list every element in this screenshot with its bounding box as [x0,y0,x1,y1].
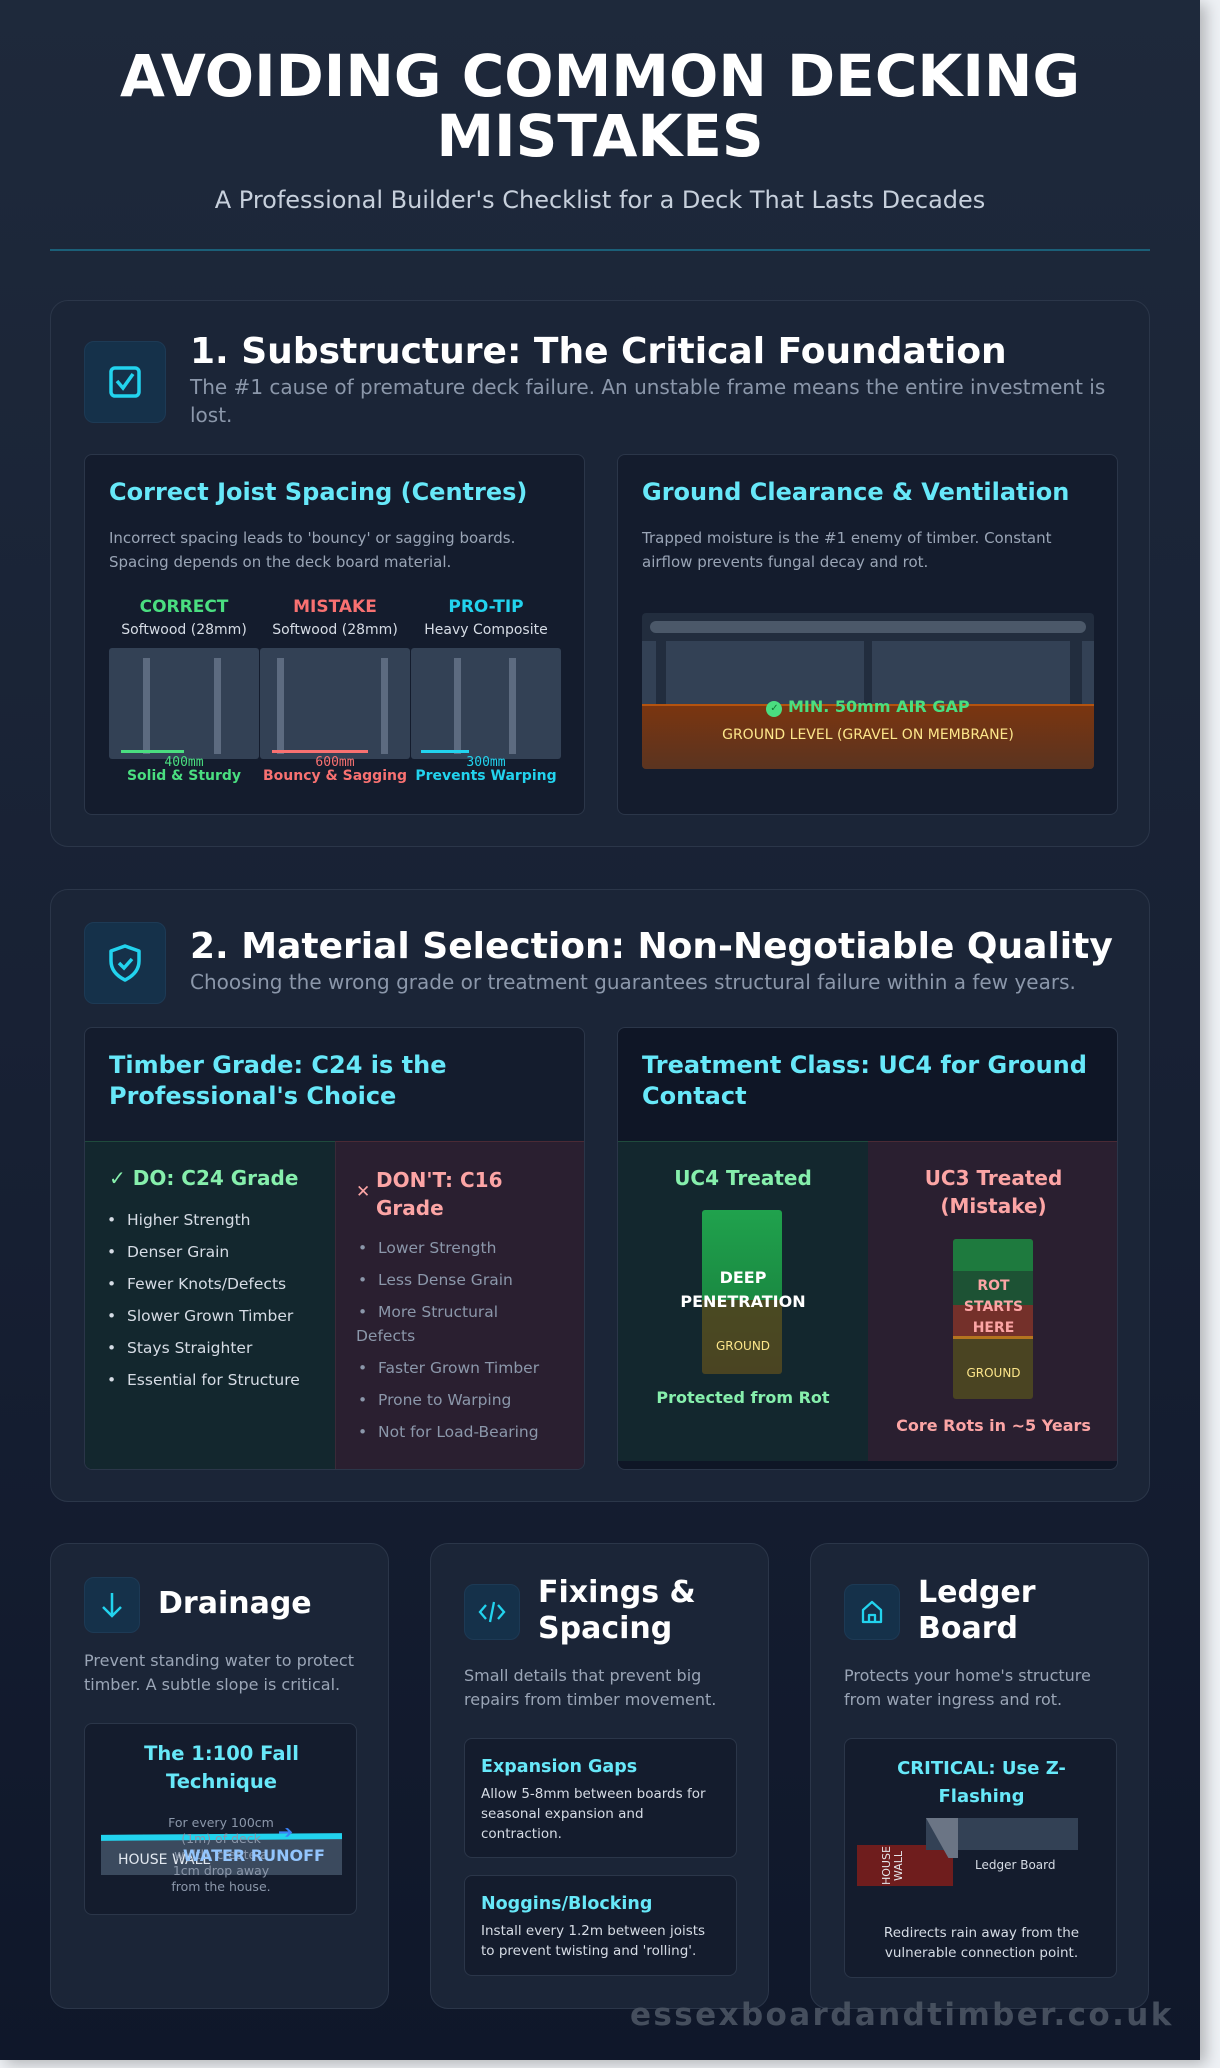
panel: joist spacing [84,454,585,815]
uc3 column: ROT [977,1278,1010,1294]
fall technique box: For every 100cm (1m) of deck width, create a 1cm drop away from the house. [168,1815,274,1894]
joist diagram [109,597,561,784]
panel: drainage [50,1543,389,2009]
title: AVOIDING COMMON DECKING [120,42,1080,110]
icon: house [844,1584,900,1640]
panel: material selection [50,889,1150,1502]
joist diagram: 300mm [466,755,506,770]
fall technique box: HOUSE WALL [118,1852,210,1868]
panel: treatment class [617,1027,1118,1470]
joist diagram: PRO-TIP [448,597,524,617]
uc3 column: UC3 Treated [925,1166,1062,1190]
uc3 column: (Mistake) [940,1194,1047,1218]
heading: 2. Material Selection: Non-Negotiable Quality [190,926,1113,967]
dont column: Less Dense Grain [378,1271,513,1289]
do column: Stays Straighter [127,1339,252,1357]
panel: joist spacing: Correct Joist Spacing (Centres) [109,478,527,506]
dont column: More Structural [378,1303,498,1321]
ventilation diagram: ✓ [770,703,779,714]
icon: code [464,1584,520,1640]
joist diagram: Prevents Warping [415,768,557,784]
dont column: Faster Grown Timber [378,1359,539,1377]
heading [538,1575,696,1646]
uc4 column: DEEP [720,1268,766,1287]
z-flashing box: Redirects rain away from the [884,1925,1079,1941]
joist diagram: 600mm [315,755,355,770]
do column: Fewer Knots/Defects [127,1275,286,1293]
flashing diagram [857,1845,953,1886]
panel: substructure [50,300,1150,847]
dont column [335,1141,586,1471]
uc3 column: GROUND [966,1366,1021,1380]
panel: ledger board [810,1543,1149,2009]
fall technique box [84,1723,357,1915]
panel: joist spacing: Incorrect spacing leads to 'bouncy' or sagging boards. Spacing depends on the deck board material. [109,529,515,571]
heading [918,1575,1036,1646]
icon: arrow down [84,1577,140,1633]
z-flashing box: Ledger Board [975,1858,1056,1872]
joist diagram: MISTAKE [293,597,377,617]
heading: Spacing [538,1611,672,1646]
dont column: DON'T: C16 Grade [376,1168,502,1220]
dont column: Not for Load-Bearing [378,1423,539,1441]
joist diagram: Heavy Composite [424,622,548,638]
panel: treatment class: Treatment Class: UC4 for Ground Contact [642,1051,1087,1110]
uc3 column: Core Rots in ~5 Years [896,1416,1091,1435]
uc4 column: PENETRATION [680,1292,806,1311]
uc3 column: HERE [973,1320,1014,1336]
noggins box: Install every 1.2m between joists to prevent twisting and 'rolling'. [481,1923,705,1959]
subtitle: A Professional Builder's Checklist for a Deck That Lasts Decades [215,186,985,214]
uc4 column [618,1141,868,1461]
description: Small details that prevent big repairs from timber movement. [464,1666,716,1709]
fall technique box: Technique [166,1770,277,1793]
z-flashing box: vulnerable connection point. [885,1945,1078,1961]
uc3 column: STARTS [964,1299,1023,1315]
description: Prevent standing water to protect timber. A subtle slope is critical. [84,1651,354,1694]
ventilation diagram [642,613,1094,769]
panel: ground clearance: Trapped moisture is the #1 enemy of timber. Constant airflow prevents fungal decay and rot. [642,529,1052,571]
expansion gaps box: Expansion Gaps [481,1757,637,1777]
do column: ✓ DO: C24 Grade [109,1166,298,1190]
z-flashing box: Flashing [938,1786,1024,1807]
z-flashing box: CRITICAL: Use Z- [897,1758,1066,1779]
joist diagram: 400mm [164,755,204,770]
heading: Ledger [918,1575,1036,1610]
uc4 column: UC4 Treated [674,1166,812,1190]
dont column: Defects [356,1327,415,1345]
fall technique box: WATER RUNOFF [183,1846,325,1865]
panel: ground clearance: Ground Clearance & Ventilation [642,478,1069,506]
title [120,42,1080,170]
heading: Board [918,1611,1018,1646]
icon: shield [84,922,166,1004]
description: Choosing the wrong grade or treatment guarantees structural failure within a few years. [190,970,1076,994]
uc4 column: GROUND [716,1339,770,1353]
expansion gaps box: Allow 5-8mm between boards for seasonal expansion and contraction. [481,1786,706,1842]
uc3 column [868,1141,1119,1461]
ventilation diagram: GROUND LEVEL (GRAVEL ON MEMBRANE) [722,727,1014,743]
expansion gaps box [464,1738,737,1858]
do column: Essential for Structure [127,1371,300,1389]
z-flashing box [844,1738,1117,1978]
joist diagram: CORRECT [140,597,228,617]
title: MISTAKES [436,102,764,170]
panel: timber grade [84,1027,585,1470]
dont column: Prone to Warping [378,1391,511,1409]
do column: Higher Strength [127,1211,251,1229]
description: The #1 cause of premature deck failure. An unstable frame means the entire investment is lost. [190,375,1105,427]
heading: Drainage [158,1586,312,1621]
do column [85,1141,335,1471]
joist diagram: Softwood (28mm) [121,622,247,638]
dont column: ✕ [356,1182,370,1202]
z-flashing box: HOUSE WALL [880,1847,905,1885]
heading: 1. Substructure: The Critical Foundation [190,331,1007,372]
panel: timber grade: Timber Grade: C24 is the Professional's Choice [109,1051,446,1110]
slope diagram [101,1838,342,1875]
noggins box [464,1875,737,1976]
joist diagram: Solid & Sturdy [127,768,241,784]
watermark: essexboardandtimber.co.uk [630,1997,1174,2033]
heading: Fixings & [538,1575,696,1610]
dont column: Lower Strength [378,1239,496,1257]
fall technique box: The 1:100 Fall [144,1742,299,1765]
fall technique box: ➔ [278,1822,293,1843]
panel: fixings [430,1543,769,2009]
do column: Slower Grown Timber [127,1307,293,1325]
noggins box: Noggins/Blocking [481,1894,652,1914]
description: Protects your home's structure from water ingress and rot. [844,1666,1091,1709]
joist diagram: Softwood (28mm) [272,622,398,638]
ventilation diagram: MIN. 50mm AIR GAP [788,697,970,716]
do column: Denser Grain [127,1243,229,1261]
icon: checkbox [84,341,166,423]
panel: ground clearance [617,454,1118,815]
joist diagram: Bouncy & Sagging [263,768,407,784]
uc4 column: Protected from Rot [656,1388,830,1407]
